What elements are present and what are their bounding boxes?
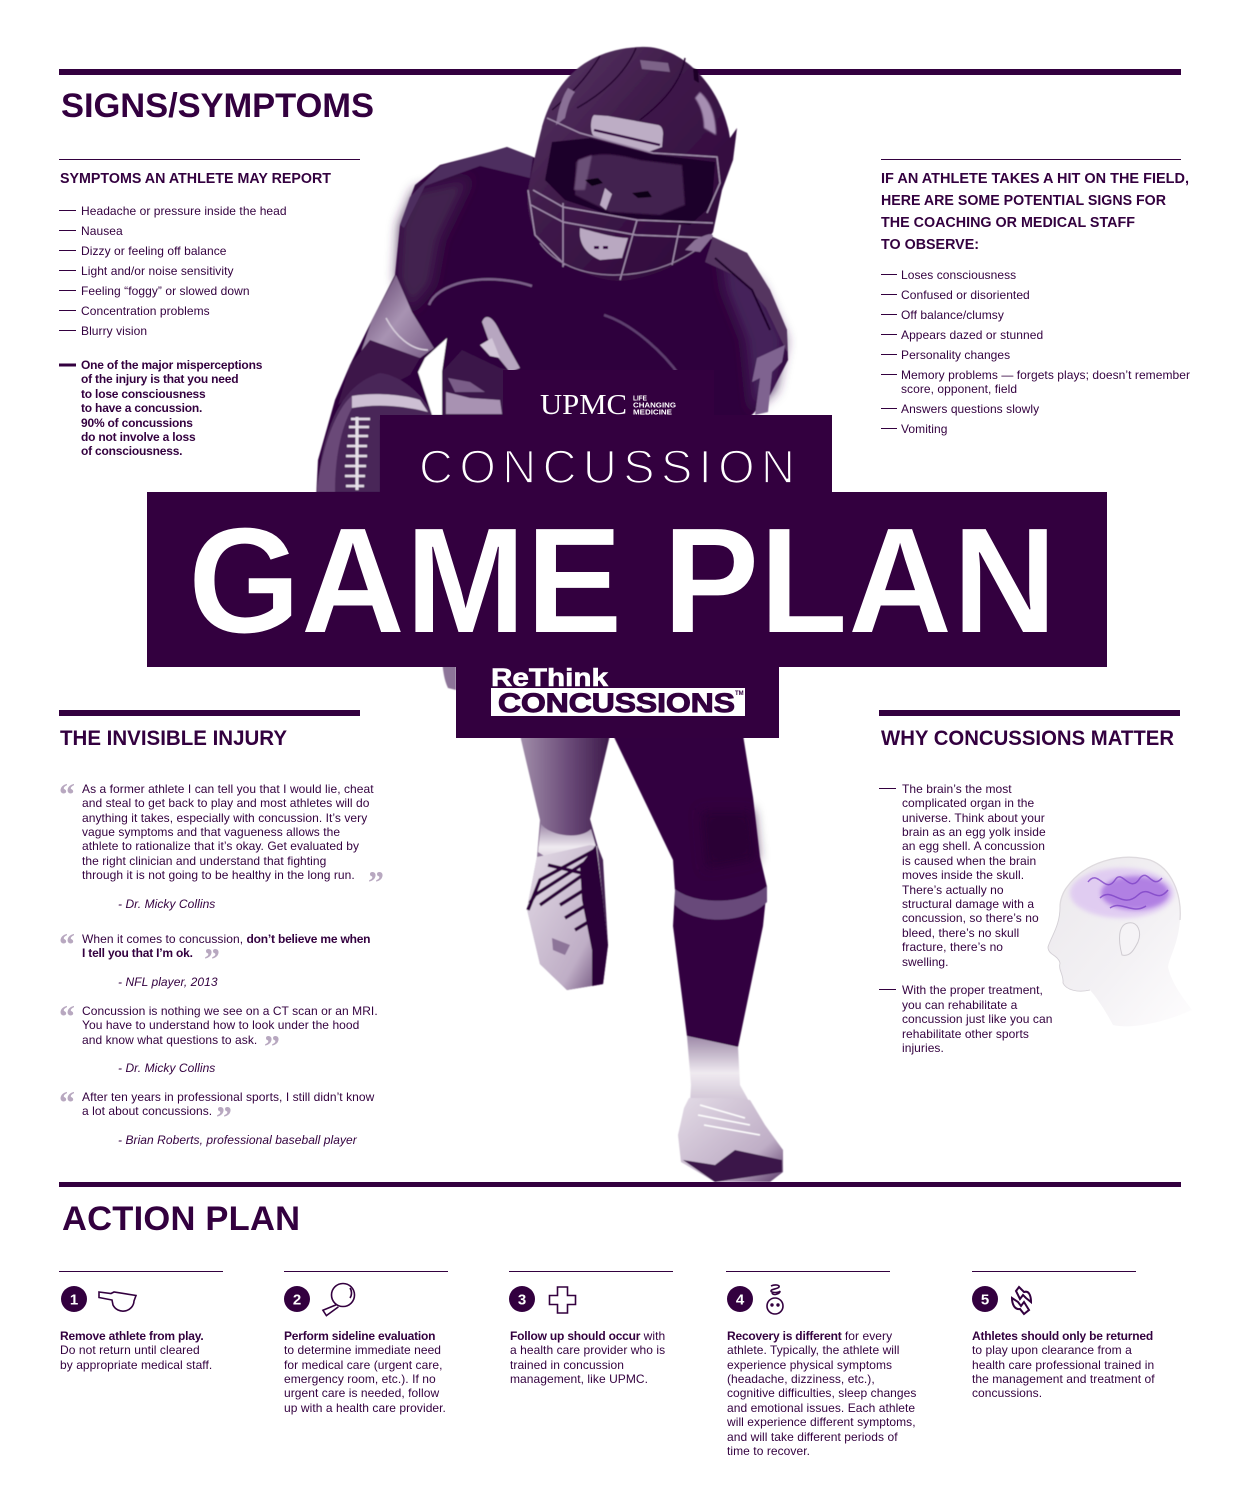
panel: the invisible injury (59, 710, 384, 1147)
number badge (972, 1286, 998, 1312)
icon: medical cross (550, 1287, 576, 1313)
quote: NFL player: I tell you that I’m ok. (82, 946, 193, 960)
subheading: IF AN ATHLETE TAKES A HIT ON THE FIELD, (881, 171, 1189, 187)
step text: Recovery is different for every (727, 1329, 892, 1343)
right knee band (675, 886, 767, 920)
step text: and will take different periods of (727, 1430, 898, 1444)
top rule (59, 69, 1181, 75)
icon: dizzy head (767, 1285, 783, 1314)
left upper arm (352, 275, 434, 378)
player torso and arm (316, 147, 788, 500)
signs list: Off balance/clumsy (901, 308, 1004, 322)
subheading: TO OBSERVE: (881, 237, 979, 253)
step text: trained in concussion (510, 1358, 624, 1372)
paragraph: treatment: concussion just like you can (902, 1012, 1052, 1026)
football laces (345, 417, 370, 490)
symptom list: Nausea (81, 224, 123, 238)
step text: the management and treatment of (972, 1372, 1155, 1386)
action plan rule (59, 1182, 1181, 1187)
logo tagline: CHANGING (633, 402, 677, 410)
right shoulder highlight (705, 237, 787, 352)
banner: ReThink Concussions logo (456, 664, 779, 738)
logo tagline: MEDICINE (633, 409, 672, 416)
banner: ReThink Concussions logo: CONCUSSIONS (498, 688, 735, 718)
step text: cognitive difficulties, sleep changes (727, 1386, 916, 1400)
paragraph: the brain: moves inside the skull. (902, 868, 1024, 882)
logo tagline: LIFE (633, 396, 647, 402)
step text: will experience different symptoms, (726, 1415, 916, 1429)
quote marks: “ (59, 926, 75, 962)
left shoulder highlight (400, 147, 533, 228)
signs list: Memory problems — forgets plays; doesn’t remember (901, 368, 1190, 382)
misperception callout: do not involve a loss (81, 430, 196, 444)
paragraph: treatment: rehabilitate other sports (902, 1027, 1029, 1041)
step text: athlete. Typically, the athlete will (727, 1343, 899, 1357)
helmet (527, 47, 737, 281)
gap between arm and torso (418, 338, 447, 415)
quote: CT scan: You have to understand how to look under the hood (82, 1018, 359, 1032)
misperception callout: to lose consciousness (81, 387, 206, 401)
number badge (284, 1286, 310, 1312)
step text: health care professional trained in (972, 1358, 1154, 1372)
signs list dashes (881, 274, 897, 428)
step 1: remove athlete from play (59, 1271, 223, 1372)
banner: ReThink Concussions logo: TM (735, 691, 744, 697)
paragraph: the brain: is caused when the brain (902, 854, 1036, 868)
step text: to determine immediate need (284, 1343, 441, 1357)
step text: for medical care (urgent care, (284, 1358, 443, 1372)
quote: Dr. Micky Collins: through it is not going to be healthy in the long run. (82, 868, 355, 882)
step text: Follow up should occur with (510, 1329, 665, 1343)
step text: management, like UPMC. (510, 1372, 648, 1386)
attribution: - Brian Roberts, professional baseball player (118, 1133, 358, 1147)
quote marks: ” (204, 941, 220, 977)
step text: up with a health care provider. (284, 1401, 446, 1415)
photo: football player running (316, 47, 788, 1182)
step 2: sideline evaluation (284, 1271, 448, 1415)
visor and face (545, 138, 715, 225)
symptom list dashes (59, 210, 76, 330)
quote marks: “ (59, 1084, 75, 1120)
attribution: - NFL player, 2013 (118, 975, 218, 989)
right leg (613, 735, 767, 1047)
quote marks: ” (216, 1099, 232, 1135)
signs list: Appears dazed or stunned (901, 328, 1043, 342)
symptom list: Blurry vision (81, 324, 147, 338)
number badge: 3 (518, 1292, 526, 1308)
banner: ReThink Concussions logo: ReThink (491, 664, 608, 692)
paragraph: the brain: universe. Think about your (902, 811, 1045, 825)
right shoulder shading (720, 250, 785, 410)
step text: experience physical symptoms (727, 1358, 892, 1372)
face (575, 154, 685, 215)
left shoe laces (528, 850, 600, 930)
step 3: follow up (509, 1271, 673, 1386)
chin guard (580, 228, 628, 260)
step text: concussions. (972, 1386, 1042, 1400)
panel: symptoms an athlete may report (59, 159, 360, 458)
misperception callout: One of the major misperceptions (81, 358, 263, 372)
paragraph: the brain: The brain’s the most (902, 782, 1012, 796)
step text: urgent care is needed, follow (284, 1386, 439, 1400)
number badge (727, 1286, 753, 1312)
step text: emergency room, etc.). If no (284, 1372, 436, 1386)
step text: Athletes should only be returned (972, 1329, 1153, 1343)
panel: signs for coaching staff (881, 159, 1190, 436)
step 4: recovery is different (726, 1271, 916, 1458)
heading: THE INVISIBLE INJURY (60, 727, 287, 750)
paragraph: the brain: concussion, so there’s no (902, 911, 1039, 925)
symptom list: Concentration problems (81, 304, 210, 318)
subheading: HERE ARE SOME POTENTIAL SIGNS FOR (881, 193, 1167, 209)
panel: why concussions matter (879, 710, 1192, 1055)
facemask (528, 118, 720, 280)
paragraph dashes (879, 788, 896, 990)
icon: magnifying glass (322, 1284, 354, 1317)
banner: concussion title: CONCUSSION (419, 440, 795, 493)
left sleeve shading (397, 178, 470, 310)
symptom list: Headache or pressure inside the head (81, 204, 287, 218)
logo wordmark: UPMC (540, 389, 627, 421)
misperception callout: of consciousness. (81, 444, 182, 458)
step text: by appropriate medical staff. (60, 1358, 212, 1372)
symptom list: Feeling “foggy” or slowed down (81, 284, 250, 298)
signs list: Answers questions slowly (901, 402, 1039, 416)
football (317, 373, 432, 492)
quote: Dr. Micky Collins: anything it takes, especially with concussion. It’s very (82, 811, 367, 825)
heading: WHY CONCUSSIONS MATTER (881, 727, 1174, 750)
step text: time to recover. (727, 1444, 810, 1458)
step text: Do not return until cleared (60, 1343, 200, 1357)
step text: a health care provider who is (510, 1343, 665, 1357)
signs list: Confused or disoriented (901, 288, 1030, 302)
paragraph: the brain: There’s actually no (902, 883, 1004, 897)
number badge: 5 (981, 1292, 989, 1308)
symptom list: Light and/or noise sensitivity (81, 264, 234, 278)
gloved hand (442, 350, 520, 415)
illustration: head with brain (1048, 857, 1192, 1026)
right sock (687, 1036, 750, 1103)
subheading: SYMPTOMS AN ATHLETE MAY REPORT (60, 171, 331, 187)
step text: Remove athlete from play. (60, 1329, 204, 1343)
helmet dome lines (552, 48, 685, 120)
arm stub beside logo (442, 660, 456, 690)
quote: Dr. Micky Collins: the right clinician and understand that fighting (82, 854, 326, 868)
paragraph: treatment: With the proper treatment, (902, 983, 1043, 997)
banner: game plan title: GAME PLAN (188, 496, 1057, 664)
paragraph: the brain: bleed, there’s no skull (902, 926, 1019, 940)
quote: Dr. Micky Collins: As a former athlete I can tell you that I would lie, cheat (82, 782, 374, 796)
paragraph: the brain: complicated organ in the (902, 796, 1034, 810)
quote: Dr. Micky Collins: and steal to get back to play and most athletes will do (82, 796, 370, 810)
quote: CT scan: and know what questions to ask. (82, 1033, 257, 1047)
left sock (538, 824, 597, 866)
attribution: - Dr. Micky Collins (118, 897, 215, 911)
signs list: Loses consciousness (901, 268, 1016, 282)
quote marks: ” (368, 864, 384, 900)
signs list: score, opponent, field (901, 382, 1017, 396)
symptom list: Dizzy or feeling off balance (81, 244, 227, 258)
left shoe (527, 845, 608, 990)
quote: Brian Roberts: a lot about concussions. (82, 1104, 212, 1118)
quote: Dr. Micky Collins: athlete to rationalize that it’s okay. Get evaluated by (82, 839, 359, 853)
misperception callout: to have a concussion. (81, 401, 202, 415)
quote: Dr. Micky Collins: vague symptoms and that vagueness allows the (82, 825, 340, 839)
heading: signs and symptoms: SIGNS/SYMPTOMS (61, 87, 374, 125)
number badge: 4 (736, 1292, 745, 1308)
step text: (headache, dizziness, etc.), (727, 1372, 875, 1386)
jersey seams (429, 279, 532, 305)
paragraph: the brain: fracture, there’s no (902, 940, 1003, 954)
number badge: 1 (70, 1292, 78, 1308)
right shoe (678, 1098, 783, 1182)
helmet bumper plate (591, 115, 663, 152)
quote: CT scan: Concussion is nothing we see on a CT scan or an MRI. (82, 1004, 378, 1018)
step text: to play upon clearance from a (972, 1343, 1132, 1357)
step text: Perform sideline evaluation (284, 1329, 435, 1343)
quote: NFL player: When it comes to concussion, don’t believe me when (82, 932, 370, 946)
misperception callout: 90% of concussions (81, 416, 193, 430)
paragraph: treatment: injuries. (902, 1041, 944, 1055)
attribution: - Dr. Micky Collins (118, 1061, 215, 1075)
quote: Brian Roberts: After ten years in professional sports, I still didn’t know (82, 1090, 375, 1104)
paragraph: the brain: an egg shell. A concussion (902, 839, 1045, 853)
quote marks: “ (59, 776, 75, 812)
step 5: return to play (972, 1271, 1155, 1400)
banner: UPMC logo block (503, 370, 714, 421)
number badge (61, 1286, 87, 1312)
icon: cycle arrows (1012, 1287, 1031, 1314)
paragraph: the brain: structural damage with a (902, 897, 1034, 911)
subheading: THE COACHING OR MEDICAL STAFF (881, 215, 1135, 231)
step text: and emotional issues. Each athlete (727, 1401, 915, 1415)
signs list: Vomiting (901, 422, 948, 436)
quote marks: ” (264, 1028, 280, 1064)
number badge (509, 1286, 535, 1312)
heading: action plan: ACTION PLAN (62, 1200, 300, 1238)
signs list: Personality changes (901, 348, 1010, 362)
paragraph: treatment: you can rehabilitate a (902, 998, 1018, 1012)
jersey number (752, 345, 785, 415)
number badge: 2 (293, 1292, 301, 1308)
icon: whistle (99, 1292, 136, 1311)
banner: concussion title (380, 415, 832, 493)
paragraph: the brain: swelling. (902, 955, 949, 969)
quote marks: “ (59, 998, 75, 1034)
left leg (520, 735, 610, 990)
paragraph: the brain: brain as an egg yolk inside (902, 825, 1046, 839)
misperception dash (59, 364, 76, 366)
misperception callout: of the injury is that you need (81, 372, 238, 386)
